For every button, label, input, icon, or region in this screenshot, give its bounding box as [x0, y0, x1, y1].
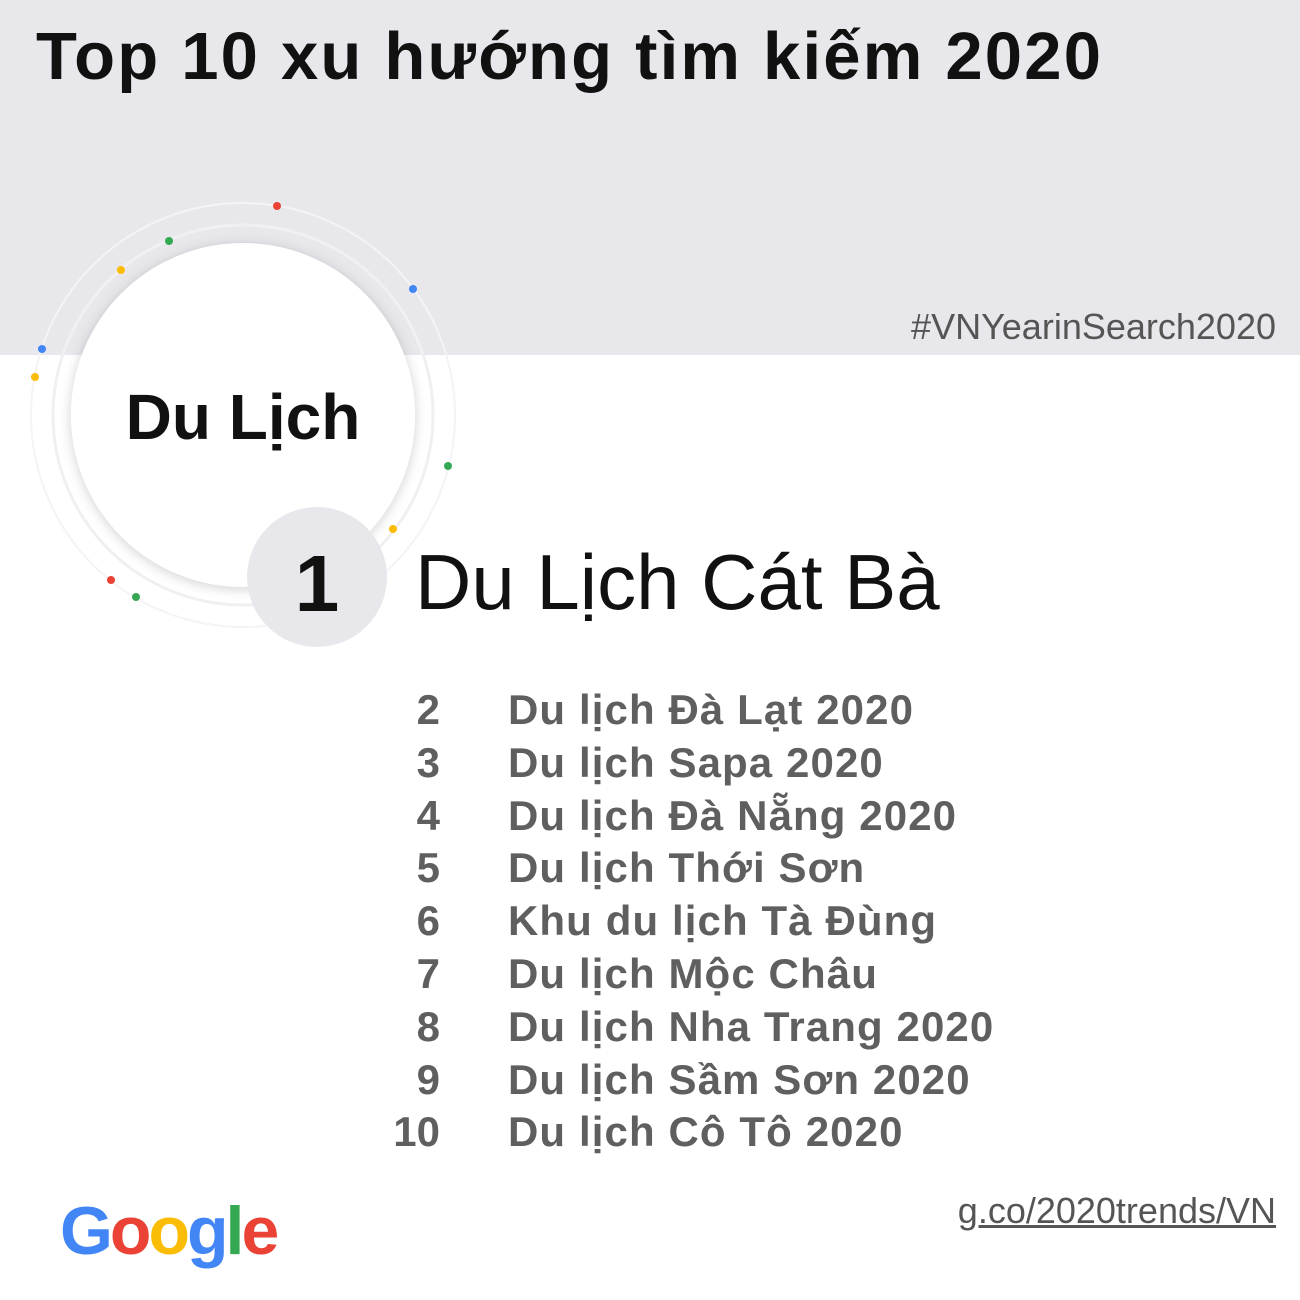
list ranks 2-10: 9 [417, 1056, 440, 1103]
list ranks 2-10: Du lịch Đà Nẵng 2020 [508, 792, 957, 839]
list ranks 2-10: 2 [417, 686, 440, 733]
rank 1 item: Du Lịch Cát Bà [415, 538, 940, 626]
list ranks 2-10: 3 [417, 739, 440, 786]
list ranks 2-10: Du lịch Cô Tô 2020 [508, 1108, 904, 1155]
list ranks 2-10: 4 [417, 792, 440, 839]
list ranks 2-10: Du lịch Đà Lạt 2020 [508, 686, 914, 733]
list ranks 2-10: 7 [417, 950, 440, 997]
list ranks 2-10: Du lịch Thới Sơn [508, 844, 865, 891]
category label: Du Lịch [126, 381, 360, 453]
list ranks 2-10: Du lịch Sầm Sơn 2020 [508, 1056, 971, 1103]
list ranks 2-10: Du lịch Mộc Châu [508, 950, 878, 997]
title: Top 10 xu hướng tìm kiếm 2020 [36, 19, 1103, 94]
list ranks 2-10: Du lịch Sapa 2020 [508, 739, 884, 786]
list ranks 2-10: Du lịch Nha Trang 2020 [508, 1003, 994, 1050]
url: g.co/2020trends/VN [958, 1190, 1276, 1231]
list ranks 2-10: 5 [417, 844, 440, 891]
rank 1 number: 1 [295, 539, 339, 628]
Google logo: Google [60, 1193, 276, 1269]
circle graphic [30, 202, 456, 647]
header band [0, 0, 1300, 355]
list ranks 2-10: Khu du lịch Tà Đùng [508, 897, 937, 944]
list ranks 2-10: 10 [393, 1108, 440, 1155]
hashtag: #VNYearinSearch2020 [911, 306, 1276, 347]
list ranks 2-10: 8 [417, 1003, 440, 1050]
list ranks 2-10: 6 [417, 897, 440, 944]
list ranks 2-10 [393, 686, 994, 1155]
